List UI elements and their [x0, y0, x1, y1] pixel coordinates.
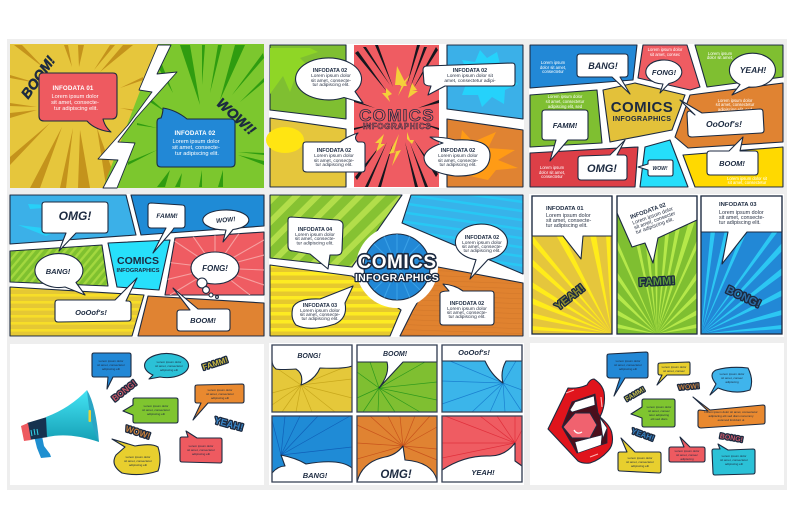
bubble bang: [577, 54, 630, 94]
white slide: [269, 343, 524, 485]
circle sun rays: [370, 234, 424, 300]
sticker famm: FAMM!: [639, 275, 675, 289]
bubble top right: tur adipiscing elit.: [463, 248, 501, 254]
bubble wow: WOW!: [216, 216, 237, 225]
bubble top right: [423, 63, 515, 95]
bubble top right: Lorem ipsum dolor: [462, 240, 502, 246]
slide white ground: [269, 44, 524, 188]
white caption text: consectetur: [542, 69, 564, 74]
bubble boom: [173, 288, 230, 331]
blue speech bubble: INFODATA 02: [174, 130, 216, 137]
orange frame: [447, 119, 523, 187]
frame green: BOOM!: [383, 351, 408, 358]
column 2 green: [617, 196, 697, 334]
bubble red: [180, 431, 222, 463]
frame yellow: BONG!: [297, 353, 321, 360]
boom lettering: BOOM!: [18, 53, 58, 101]
yellow lightning bolts: [375, 66, 418, 166]
frames: [10, 195, 264, 336]
blue frame burst: [455, 50, 518, 107]
bubble bottom right: sit amet, consecte-: [447, 310, 488, 316]
white caption text: dolor sit amet,: [707, 55, 733, 60]
light streaks in blue frame: [18, 204, 70, 236]
bubble top right: sit amet, consecte-: [462, 244, 503, 250]
sticker wow: WOW!: [678, 383, 700, 392]
infographics subtitle: INFOGRAPHICS: [363, 122, 431, 131]
column 2 green: Lorem ipsum dolor: [632, 206, 674, 227]
bubble red: sit amet, consec: [676, 453, 698, 457]
bubble yellow two: Lorem ipsum dolor: [628, 456, 652, 460]
frame deep blue: [272, 416, 352, 482]
bubble famm: [542, 110, 588, 161]
bubble famm: FAMM!: [156, 213, 178, 220]
bubble blue: adipiscing elit: [619, 367, 637, 371]
sticker famm: FAMM!: [201, 355, 229, 372]
white caption text: adipiscing elit, sed: [548, 104, 583, 109]
bubble teal: sit amet, consectetur: [155, 364, 183, 368]
column 3 blue: sit amet, consecte-: [719, 215, 764, 221]
bubble top left: Lorem ipsum dolor: [295, 232, 335, 238]
bubble omg: [42, 202, 108, 251]
column 3 blue: tur adipiscing elit.: [719, 220, 761, 226]
bubble top left: Lorem ipsum dolor: [311, 73, 351, 79]
column 1 yellow: INFODATA 01: [546, 206, 584, 212]
bubble red: Lorem ipsum dolor: [675, 449, 699, 453]
bubble bottom right: INFODATA 02: [450, 301, 484, 307]
bubble ooof: [680, 100, 764, 137]
slide white ground: [529, 194, 784, 337]
bubble teal: sit amet, consectetur: [720, 458, 748, 462]
bubble light blue: adipiscing: [725, 380, 739, 384]
bubble blue: adipiscing elit: [102, 367, 120, 371]
white caption text: sit amet, consectetur: [728, 180, 767, 185]
bubble green: [631, 399, 675, 427]
column 1 yellow: [532, 196, 612, 334]
bubble light blue: sit amet, consec: [721, 376, 743, 380]
bubble orange: sit amet, consectetur: [206, 392, 234, 396]
column 1 yellow: sit amet, consecte-: [546, 218, 591, 224]
bubble yellow two: sit amet, consectetur: [626, 460, 654, 464]
yellow half rays: [10, 45, 143, 188]
bubble ooof: [55, 278, 137, 322]
bubble fong with thought dots: [191, 252, 239, 298]
bubble yellow: sit amet, consectetur: [124, 459, 152, 463]
bubble teal: adipiscing elit: [725, 462, 743, 466]
bubble yellow: adipiscing elit: [129, 463, 147, 467]
blue speech bubble: [157, 108, 235, 167]
bubble orange: [193, 384, 244, 420]
infographics subtitle: INFOGRAPHICS: [355, 272, 439, 284]
bubble red: Lorem ipsum dolor: [189, 444, 213, 448]
bubble ooof: OoOof's!: [75, 308, 107, 317]
frame red: YEAH!: [471, 468, 495, 477]
frame yellow: [272, 345, 352, 412]
bubble green: [123, 398, 178, 423]
white caption text: Lorem ipsum dolor: [648, 47, 683, 52]
bubble bottom right: [424, 137, 490, 176]
bubble blue: [607, 352, 648, 396]
bubble top left: sit amet, consecte-: [311, 78, 352, 84]
sticker wow: WOW!: [124, 423, 152, 441]
bubble bottom right: tur adipiscing elit.: [439, 162, 477, 168]
bubble red: sit amet, consectetur: [187, 448, 215, 452]
blue speech bubble: tur adipiscing elit.: [175, 151, 219, 157]
column 3 blue: INFODATA 03: [719, 202, 757, 208]
white caption text: Lorem ipsum: [540, 165, 565, 170]
bubble wow: [638, 160, 673, 176]
white caption text: dolor sit amet,: [540, 65, 566, 70]
panel: slide 1 versus layout: [10, 44, 264, 188]
bubble bottom right: [440, 284, 494, 325]
frame red: [442, 416, 522, 482]
bubble red: [669, 437, 705, 462]
sticker bong: BONG!: [110, 378, 139, 403]
lightning bolt divider: [98, 45, 177, 188]
bubble yeah: [729, 53, 775, 95]
yellow half: [10, 44, 264, 188]
panel: slide 9 mouth: [530, 343, 784, 485]
bubble green: Lorem ipsum dolor: [144, 404, 168, 408]
icon: megaphone: [21, 390, 99, 458]
bubble ooof: OoOof's!: [706, 119, 742, 129]
red speech bubble: sit amet, consecte-: [51, 100, 99, 106]
slide white ground: [529, 44, 784, 188]
sticker yeah: YEAH!: [553, 282, 587, 313]
blue speech bubble: Lorem ipsum dolor: [172, 139, 220, 145]
green frame burst: [270, 48, 318, 94]
red centre frame: [354, 45, 439, 187]
column 2 green: tur adipiscing elit.: [635, 217, 675, 236]
white caption text: adipiscing elit, sed: [718, 107, 753, 112]
bubble bottom left: INFODATA 03: [303, 303, 337, 309]
frame orange: OMG!: [380, 469, 412, 481]
white caption text: sit amet, consec: [650, 52, 680, 57]
comics title: COMICS: [358, 252, 436, 273]
bubble light blue: Lorem ipsum dolor: [720, 372, 744, 376]
frames: [530, 45, 783, 187]
bubble green: adipiscing elit: [147, 412, 165, 416]
slide white ground: [269, 194, 524, 337]
bubble fong: FONG!: [652, 68, 677, 77]
wow lettering: WOW!!: [214, 95, 259, 138]
bubble light blue: [710, 367, 752, 395]
bubble teal: Lorem ipsum dolor: [157, 360, 181, 364]
bubble top right: INFODATA 02: [453, 68, 487, 74]
bubble fong with thought dots: FONG!: [202, 264, 228, 273]
bubble yeah: YEAH!: [740, 65, 766, 75]
black comic rays: [354, 45, 439, 187]
panel: slide 3 comic strip: [529, 44, 784, 188]
yellow frame blob: [266, 127, 304, 153]
bubble yellow: Lorem ipsum dolor: [662, 365, 686, 369]
bubble bang: BANG!: [588, 61, 618, 71]
bubble green: sit amet, consectetur: [142, 408, 170, 412]
sticker yeah: YEAH!: [630, 426, 655, 443]
panel: slide 2 comics page: [266, 44, 524, 188]
bubble bottom left: [292, 286, 353, 328]
frame orange: [357, 416, 437, 482]
sticker famm: FAMM!: [624, 386, 646, 403]
column 3 blue: [701, 196, 782, 334]
bubble blue: sit amet, consectetur: [614, 363, 642, 367]
bubble orange: adipiscing elit: [211, 396, 229, 400]
bubble teal: [712, 444, 755, 475]
bubble top right: amet, consectetur adipi-: [444, 78, 496, 84]
bubble blue: Lorem ipsum dolor: [616, 359, 640, 363]
bubble top left: INFODATA 04: [298, 227, 332, 233]
white caption text: dolor sit amet,: [539, 170, 565, 175]
panel: slide 6 three columns: [529, 194, 784, 337]
bubble blue: sit amet, consectetur: [97, 363, 125, 367]
bubble boom: BOOM!: [190, 316, 216, 325]
bubble bang: BANG!: [46, 267, 71, 276]
bubble boom: BOOM!: [719, 159, 745, 168]
bubble green: tetur adipiscing: [649, 413, 669, 417]
bubble boom: [707, 137, 758, 175]
bubble bottom right: tur adipiscing elit.: [448, 314, 486, 320]
panel: slide 7 megaphone: [10, 344, 264, 485]
red speech bubble: tur adipiscing elit.: [54, 106, 98, 112]
frame green: [357, 345, 437, 412]
sticker yeah: YEAH!: [213, 415, 244, 434]
column 2 green: INFODATA 02: [630, 202, 668, 221]
icon: shouting mouth: [548, 379, 612, 463]
bubble famm: FAMM!: [553, 121, 578, 130]
yellow frame: [270, 118, 346, 187]
white caption text: sit amet, consectetur: [716, 102, 755, 107]
blue speech bubble: sit amet, consecte-: [172, 145, 220, 151]
frame deep blue: BANG!: [303, 471, 328, 480]
bubble yellow: sit amet, consec: [663, 369, 685, 373]
bubble bottom right: Lorem ipsum dolor: [438, 153, 478, 159]
white caption text: consectetur: [541, 174, 563, 179]
white caption text: [539, 47, 768, 185]
red speech bubble: Lorem ipsum dolor: [51, 94, 99, 100]
bubble yellow: [112, 439, 160, 475]
bubble yellow: Lorem ipsum dolor: [126, 455, 150, 459]
comics title: COMICS: [117, 255, 159, 267]
white slide: [530, 343, 784, 485]
white caption text: Lorem ipsum: [541, 60, 566, 65]
bubble bottom left: tur adipiscing elit.: [301, 316, 339, 322]
bubble teal: [145, 354, 189, 379]
bubble bottom right: Lorem ipsum dolor: [447, 306, 487, 312]
bubble top left: tur adipiscing elit.: [296, 241, 334, 247]
bubble yellow two: [618, 438, 661, 473]
column 3 blue: Lorem ipsum dolor: [719, 210, 764, 216]
blue circle: [364, 234, 430, 300]
bubble wow: [203, 210, 249, 242]
blue frame: [447, 45, 523, 119]
bubble teal: Lorem ipsum dolor: [722, 454, 746, 458]
bubble bottom left: INFODATA 02: [317, 148, 351, 154]
column 2 green: sit amet, consecter: [633, 211, 677, 231]
frame blue: [442, 345, 522, 412]
bubble green: sit amet, consec: [648, 409, 670, 413]
bubble red: adipiscing: [680, 457, 694, 461]
bubble yellow two: adipiscing elit: [631, 464, 649, 468]
panel: slide 5 round title: [269, 194, 524, 337]
bubble omg: OMG!: [59, 209, 91, 223]
bubble orange: Lorem ipsum dolor sit amet, consectetur: [704, 410, 758, 414]
column 1 yellow: tur adipiscing elit.: [546, 223, 588, 229]
bubble blue: [92, 353, 131, 389]
orange frame burst: [458, 130, 518, 180]
bubble red: adipiscing elit: [192, 452, 210, 456]
bubble orange: [693, 397, 765, 428]
bubble teal: adipiscing elit: [160, 368, 178, 372]
bubble top right: [455, 224, 507, 279]
comics title: COMICS: [359, 106, 435, 125]
bubble omg: OMG!: [587, 163, 617, 175]
white caption text: Lorem ipsum dolor: [548, 94, 583, 99]
bubble famm: [148, 203, 185, 253]
bubble top right: INFODATA 02: [465, 235, 499, 241]
bubble top left: sit amet, consecte-: [295, 236, 336, 242]
bubble orange: euismod tincidunt ut: [718, 418, 745, 422]
infographics subtitle: INFOGRAPHICS: [117, 268, 160, 274]
bubble bottom left: tur adipiscing elit.: [315, 162, 353, 168]
column 1 yellow: Lorem ipsum dolor: [546, 213, 591, 219]
sticker bong: BONG!: [719, 433, 743, 444]
white circle medallion: [356, 226, 438, 308]
green half: [103, 44, 264, 188]
white caption text: Lorem ipsum: [708, 51, 733, 56]
bubble orange: Lorem ipsum dolor: [208, 388, 232, 392]
white slide: [10, 344, 264, 485]
bubble bottom left: sit amet, consecte-: [300, 312, 341, 318]
frames: [270, 195, 523, 336]
bubble bottom left: Lorem ipsum dolor: [314, 153, 354, 159]
bubble omg: [578, 140, 627, 180]
sticker bong: BONG!: [724, 284, 762, 310]
bubble bottom left: sit amet, consecte-: [314, 158, 355, 164]
bubble green: Lorem ipsum dolor: [647, 405, 671, 409]
bubble wow: WOW!: [652, 166, 668, 172]
bubble top left: INFODATA 02: [313, 68, 347, 74]
bubble bottom left: [303, 133, 365, 172]
slide white ground: [10, 194, 264, 337]
bubble green: elit sed diam: [651, 417, 668, 421]
white caption text: Lorem ipsum dolor: [718, 98, 753, 103]
comics title: COMICS: [611, 99, 673, 116]
bubble top left: tur adipiscing elit.: [312, 82, 350, 88]
bubble bottom left: Lorem ipsum dolor: [300, 308, 340, 314]
panel: slide 4 comic strip: [10, 194, 264, 337]
infographics subtitle: INFOGRAPHICS: [613, 114, 671, 123]
red frame rays: [165, 232, 264, 295]
bubble yellow: [657, 362, 690, 385]
bubble fong: [646, 60, 682, 93]
bubble orange: adipiscing elit sed diam nonummy: [708, 414, 754, 418]
bubble blue: Lorem ipsum dolor: [99, 359, 123, 363]
green half rays: [128, 45, 264, 187]
bubble top left: [296, 58, 363, 103]
bubble top right: Lorem ipsum dolor sit: [447, 73, 494, 79]
bubble bottom right: INFODATA 02: [441, 148, 475, 154]
frame blue: OoOof's!: [458, 348, 490, 357]
panel: slide 8 six frames: [269, 343, 524, 485]
bubble top left: [288, 217, 343, 269]
red speech bubble: INFODATA 01: [52, 85, 94, 92]
white caption text: sit amet, consectetur: [546, 99, 585, 104]
bubble bottom right: sit amet, consecte-: [438, 158, 479, 164]
red speech bubble: [39, 73, 117, 132]
white caption text: Lorem ipsum dolor sit: [727, 176, 768, 181]
bubble bang: [35, 254, 85, 295]
green frame: [270, 45, 346, 119]
